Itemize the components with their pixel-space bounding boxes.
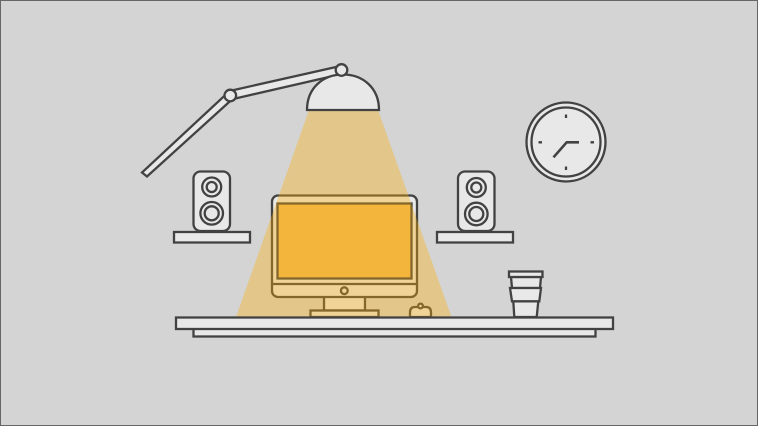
icon: left speaker on shelf <box>174 172 250 242</box>
icon: wall clock <box>526 102 606 182</box>
icon: desk lamp <box>142 64 379 176</box>
icon: mouse <box>410 304 431 317</box>
lamp lower arm <box>142 92 233 176</box>
lamp upper arm <box>230 66 342 100</box>
lamp shade <box>307 74 379 110</box>
icon: computer monitor <box>272 196 417 317</box>
desk <box>176 318 613 336</box>
light beam <box>236 110 452 317</box>
icon: right speaker on shelf <box>437 172 513 242</box>
lamp top joint <box>336 64 347 76</box>
lamp elbow joint <box>224 90 236 101</box>
icon: coffee cup <box>509 272 542 317</box>
